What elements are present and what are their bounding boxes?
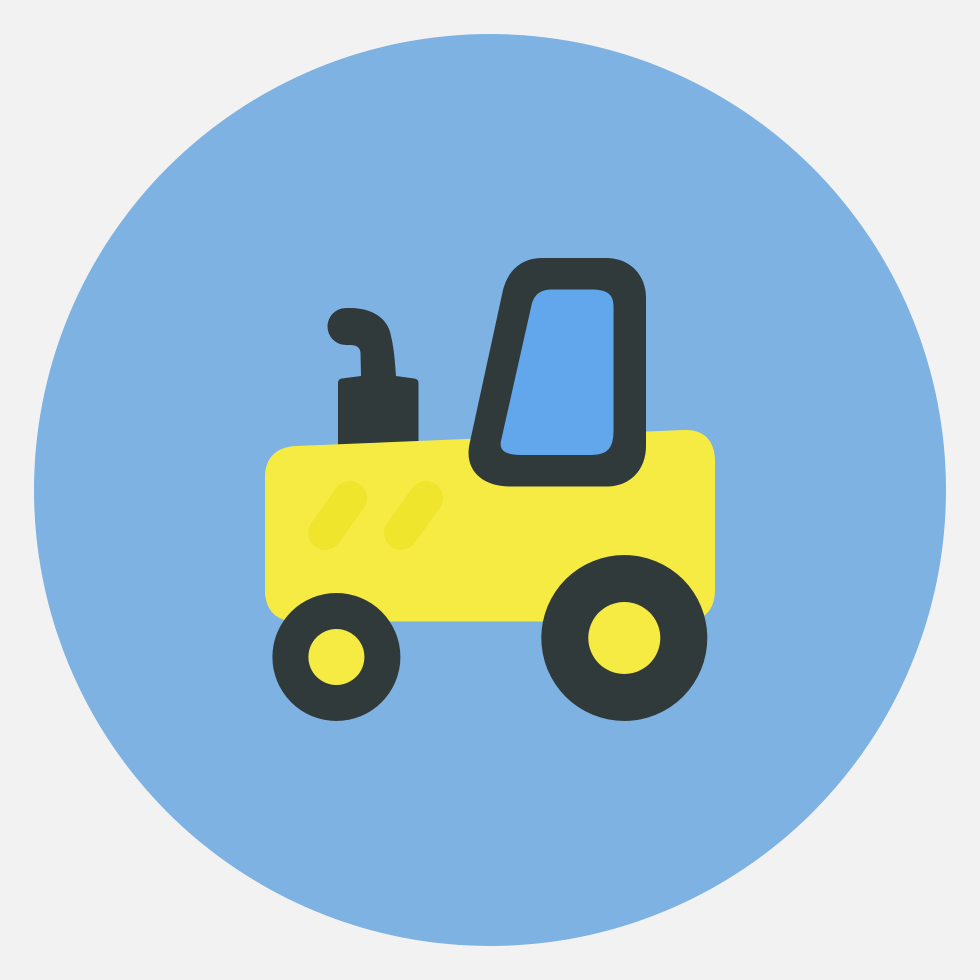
icon: tractor <box>265 258 715 721</box>
tractor body <box>265 430 715 622</box>
exhaust stack <box>328 308 418 450</box>
cab window <box>501 290 614 455</box>
body highlight right <box>401 498 426 533</box>
front wheel <box>272 593 400 721</box>
rear wheel <box>541 555 707 721</box>
cab frame <box>469 258 646 486</box>
body highlight left <box>325 498 350 533</box>
